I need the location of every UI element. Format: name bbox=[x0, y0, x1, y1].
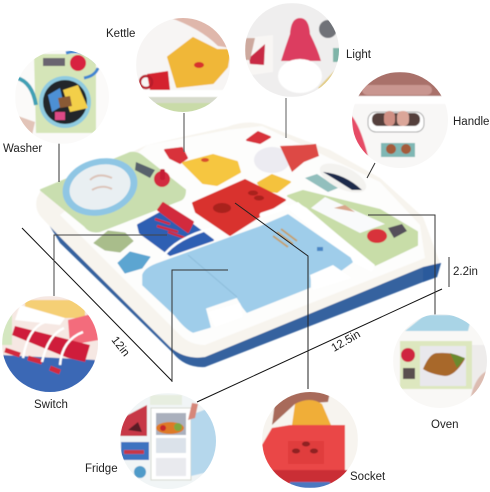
label: 12in: 12in bbox=[109, 334, 131, 359]
dimension line: 2.2in bbox=[448, 257, 450, 287]
oven panel bbox=[288, 191, 417, 265]
washer panel bbox=[41, 150, 185, 231]
circle: socket bbox=[262, 390, 358, 488]
leader: washer bbox=[58, 143, 60, 182]
green clip bbox=[94, 231, 133, 252]
circle: oven bbox=[393, 314, 489, 410]
fridge panel bbox=[143, 215, 352, 332]
blue plug bbox=[118, 252, 150, 273]
kettle button and kettle bbox=[165, 148, 240, 185]
circle: handle bbox=[351, 72, 449, 169]
leader: socket bbox=[235, 203, 308, 389]
label: Switch: Switch bbox=[34, 399, 68, 411]
socket panel bbox=[193, 180, 285, 235]
circle: light bbox=[245, 3, 340, 97]
dimension line: 12in bbox=[22, 228, 172, 381]
paper clip divider bbox=[262, 207, 286, 215]
white cord bbox=[162, 228, 213, 258]
board base: navy edge bbox=[37, 205, 441, 367]
carry handle slot bbox=[316, 157, 370, 199]
switch panel bbox=[138, 203, 213, 255]
label: 12.5in: 12.5in bbox=[330, 329, 363, 355]
dimension line: 12.5in bbox=[197, 289, 442, 402]
circle: washer bbox=[18, 50, 100, 144]
tray inner surface bbox=[60, 126, 425, 345]
circle: kettle bbox=[136, 17, 231, 113]
yellow plug bbox=[258, 175, 290, 192]
white strip beside oven bbox=[286, 202, 375, 272]
label: Handle: Handle bbox=[453, 116, 489, 128]
leader: light bbox=[285, 98, 287, 138]
label: Washer: Washer bbox=[3, 143, 42, 155]
label: Oven: Oven bbox=[431, 419, 458, 431]
circle: fridge bbox=[120, 393, 217, 490]
circle: switch bbox=[2, 296, 99, 393]
family sticker bbox=[305, 174, 338, 192]
leader: kettle bbox=[183, 113, 185, 152]
leader: fridge bbox=[172, 270, 228, 382]
board corner: dark blue bbox=[423, 263, 441, 282]
leader: handle bbox=[367, 163, 375, 178]
leader: oven bbox=[368, 215, 435, 315]
label: 2.2in: 2.2in bbox=[453, 266, 478, 278]
label: Light: Light bbox=[346, 49, 372, 61]
label: Socket: Socket bbox=[350, 471, 386, 483]
lamp bbox=[254, 144, 319, 173]
board top: white tray bbox=[36, 123, 440, 358]
label: Kettle: Kettle bbox=[106, 28, 135, 40]
label: Fridge: Fridge bbox=[85, 463, 118, 475]
leader: switch bbox=[54, 235, 167, 296]
light switch bbox=[247, 132, 270, 143]
toy board bbox=[36, 123, 441, 367]
